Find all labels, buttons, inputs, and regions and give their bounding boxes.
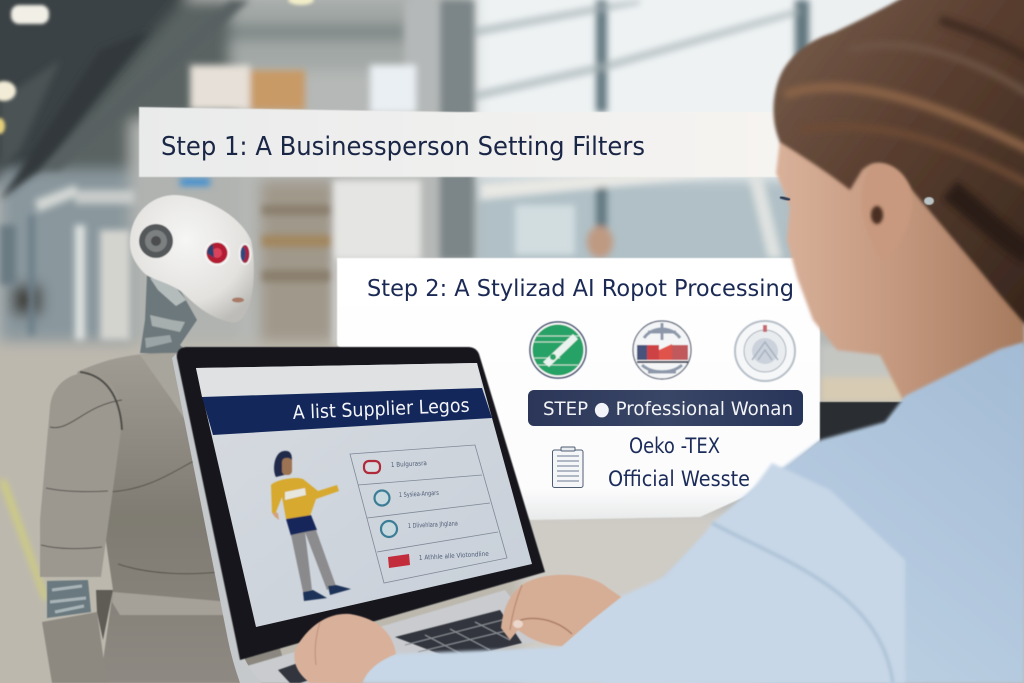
laptop edge <box>172 354 262 683</box>
text: Oeko-TEX: Oeko -TEX <box>629 434 720 458</box>
woman <box>294 0 1024 683</box>
list row 3: 1 Dlivehlara Jhglana <box>408 519 458 530</box>
laptop screen <box>196 363 532 627</box>
robot <box>40 195 290 683</box>
robot wrist <box>47 580 91 618</box>
seal: grey <box>735 321 795 381</box>
woman ear <box>862 164 912 261</box>
bar: step label <box>528 390 803 426</box>
icon: clipboard <box>552 447 583 488</box>
laptop <box>172 347 545 683</box>
robot neck <box>140 272 197 355</box>
hair clip <box>924 197 934 205</box>
list row 4 <box>388 550 489 568</box>
heading: step 2: Step 2: A Stylizad AI Ropot Processing <box>367 276 794 302</box>
seal: flag <box>633 321 691 379</box>
woman hair <box>774 0 1024 330</box>
woman right hand <box>501 575 621 646</box>
hair highlights <box>785 20 1024 255</box>
panel: step 1 heading banner <box>139 107 786 177</box>
list row 4: 1 Athhle alle Vlotondline <box>419 550 489 562</box>
laptop deck <box>240 590 545 683</box>
list row 2 <box>374 489 440 506</box>
robot torso <box>77 353 290 683</box>
heading: step 1: Step 1: A Businessperson Setting Filters <box>161 132 645 162</box>
robot hip band <box>112 592 232 615</box>
list row 1: 1 Bulgurasra <box>391 459 427 469</box>
robot forearm <box>42 612 107 683</box>
robot eyes <box>204 240 252 266</box>
robot mouth <box>232 298 244 302</box>
robot ear disc <box>139 224 173 258</box>
woman sleeve <box>362 463 905 683</box>
woman left hand <box>294 614 396 683</box>
seal: green <box>530 322 586 378</box>
laptop bezel <box>177 347 545 660</box>
dark furniture behind shoulder <box>820 402 905 446</box>
list row 1 <box>364 459 427 473</box>
robot head <box>130 195 254 322</box>
screen character <box>271 451 351 601</box>
screen list table <box>350 445 507 583</box>
screen title band <box>202 388 492 435</box>
laptop keyboard <box>278 610 522 683</box>
woman neck and face <box>776 130 1024 400</box>
panel: step 2 card <box>337 258 820 520</box>
list row 3 <box>381 519 458 537</box>
screen title band: A list Supplier Legos <box>292 395 470 424</box>
robot upper arm <box>40 373 121 577</box>
text: official website: Official Wesste <box>608 467 750 491</box>
woman eyelash <box>780 197 790 200</box>
bar: step label: STEP ● Professional Wonan <box>543 398 793 420</box>
list row 2: 1 Sysiea-Angars <box>399 489 440 499</box>
woman shirt shoulder <box>600 342 1024 683</box>
screen top strip <box>196 363 482 397</box>
